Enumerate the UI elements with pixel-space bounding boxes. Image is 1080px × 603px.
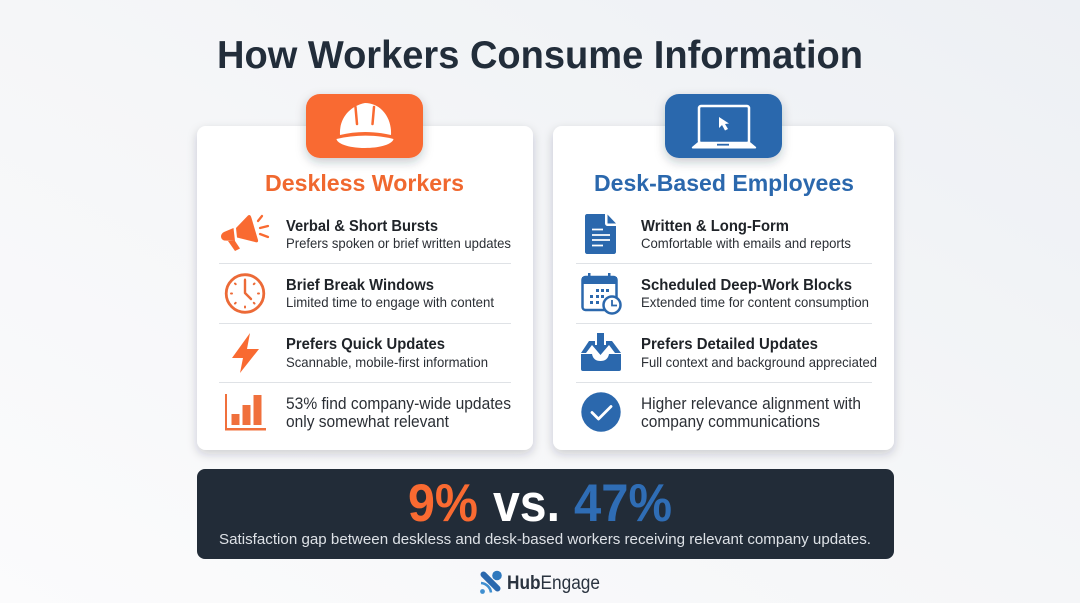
callout: satisfaction gap (197, 469, 894, 559)
logo: HubEngage: HubEngage (507, 573, 600, 594)
icon: logo mark (480, 571, 502, 594)
row: higher relevance: company communications (641, 413, 820, 431)
row: 53 percent statistic: 53% find company-wide updates (286, 395, 511, 413)
title: How Workers Consume Information (217, 34, 863, 77)
icon: clock (226, 275, 264, 312)
row: verbal and short bursts (221, 215, 511, 251)
row: brief break windows (226, 275, 494, 312)
icon: hard hat badge (306, 94, 423, 158)
row: prefers detailed updates: Prefers Detailed Updates (641, 336, 818, 353)
caption: Satisfaction gap between deskless and desk-based workers receiving relevant company updates. (219, 531, 871, 548)
icon: laptop badge (665, 94, 782, 158)
icon: check circle (581, 392, 621, 432)
row: written and long-form: Comfortable with emails and reports (641, 235, 851, 251)
icon: lightning bolt (232, 333, 259, 373)
statistic: 9 percent vs 47 percent (408, 474, 672, 533)
row: written and long-form (585, 214, 851, 254)
row: prefers quick updates: Scannable, mobile-first information (286, 354, 488, 370)
icon: bar chart (225, 394, 266, 430)
row: 53 percent statistic: only somewhat relevant (286, 413, 449, 431)
row: scheduled deep-work blocks: Scheduled Deep-Work Blocks (641, 277, 852, 294)
row: higher relevance (581, 392, 861, 432)
icon: inbox download (581, 333, 621, 371)
icon: calendar with clock (582, 273, 620, 314)
row: prefers detailed updates: Full context and background appreciated (641, 354, 877, 370)
statistic: 9 percent vs 47 percent: 47% (574, 474, 672, 533)
heading: desk-based employees: Desk-Based Employees (594, 170, 854, 196)
icon: megaphone (221, 215, 268, 251)
statistic: 9 percent vs 47 percent: 9% (408, 474, 478, 533)
panel: desk-based employees (553, 94, 894, 450)
heading: deskless workers: Deskless Workers (265, 170, 464, 196)
row: brief break windows: Brief Break Windows (286, 277, 434, 294)
panel: deskless workers (197, 94, 533, 450)
row: scheduled deep-work blocks (582, 273, 869, 314)
row: brief break windows: Limited time to engage with content (286, 294, 494, 310)
row: prefers quick updates (232, 333, 488, 373)
row: higher relevance: Higher relevance alignment with (641, 395, 861, 413)
row: prefers quick updates: Prefers Quick Updates (286, 336, 445, 353)
row: written and long-form: Written & Long-Form (641, 218, 789, 235)
logo: HubEngage (480, 571, 600, 594)
row: prefers detailed updates (581, 333, 877, 371)
statistic: 9 percent vs 47 percent: vs. (493, 474, 560, 533)
icon: document (585, 214, 616, 254)
row: scheduled deep-work blocks: Extended time for content consumption (641, 294, 869, 310)
row: 53 percent statistic (225, 394, 511, 431)
row: verbal and short bursts: Verbal & Short Bursts (286, 218, 438, 235)
row: verbal and short bursts: Prefers spoken or brief written updates (286, 235, 511, 251)
